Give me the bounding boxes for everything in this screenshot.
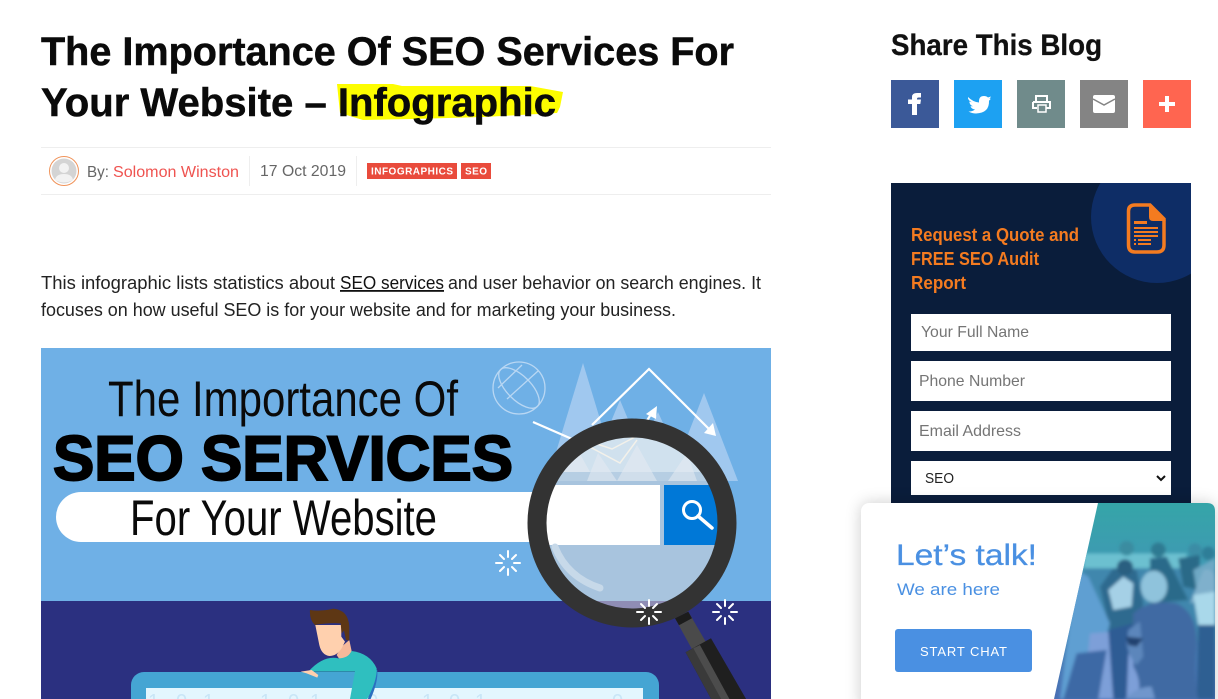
chat heading: Let’s talk!: [896, 539, 1037, 572]
print button: [1017, 80, 1065, 128]
start chat button: START CHAT: [920, 644, 1007, 659]
chat subheading: We are here: [897, 580, 1000, 599]
arrow heads: [646, 406, 716, 436]
title line 2: Your Website – Infographic: [41, 81, 556, 125]
field: service select: [911, 461, 1171, 495]
dark band: [41, 601, 771, 699]
form heading: Report: [911, 273, 966, 293]
author avatar: [50, 156, 78, 186]
sparkle center: [637, 600, 661, 624]
search pill: [56, 492, 560, 542]
field: name: Your Full Name: [921, 324, 1029, 341]
author: By:: [87, 164, 109, 181]
field: phone: [911, 361, 1171, 401]
intro paragraph: focuses on how useful SEO is for your website and for marketing your business.: [41, 300, 676, 320]
document badge: [1091, 183, 1191, 283]
sparkle right: [713, 600, 737, 624]
infographic image: [41, 348, 771, 699]
meta bar: [41, 147, 771, 195]
sky background: [41, 348, 771, 601]
graphic heading bottom: For Your Website: [130, 490, 437, 546]
share buttons: [891, 80, 1191, 128]
intro paragraph: This infographic lists statistics about: [41, 273, 335, 293]
field: service select: SEO: [925, 470, 954, 487]
start chat button: [895, 629, 1032, 672]
magnifier lens: [548, 438, 718, 608]
field: name: [911, 314, 1171, 351]
email button: [1080, 80, 1128, 128]
magnifier ring: [537, 428, 727, 618]
form heading: Request a Quote and: [911, 225, 1079, 245]
magnifier handle: [675, 612, 747, 699]
graphic heading top: The Importance Of: [108, 371, 458, 427]
monitor: [131, 672, 659, 699]
share heading: Share This Blog: [891, 29, 1102, 62]
quote form panel: [891, 183, 1191, 503]
intro paragraph: and user behavior on search engines. It: [448, 273, 761, 293]
tag: seo: SEO: [465, 166, 487, 178]
author: Solomon Winston: [113, 164, 239, 181]
intro paragraph: [41, 273, 761, 320]
form heading: [911, 225, 1079, 293]
person: [301, 609, 377, 699]
title highlight: [337, 84, 563, 120]
twitter button: [954, 80, 1002, 128]
sparkle left: [496, 551, 520, 575]
form heading: FREE SEO Audit: [911, 249, 1039, 269]
tag: seo: [461, 163, 491, 179]
tag: infographics: [367, 163, 457, 179]
date: 17 Oct 2019: [260, 163, 346, 180]
more button: [1143, 80, 1191, 128]
globe icon: [492, 361, 546, 415]
chat widget: [861, 503, 1218, 699]
facebook button: [891, 80, 939, 128]
title line 1: The Importance Of SEO Services For: [41, 30, 734, 74]
intro paragraph: SEO services: [340, 273, 444, 293]
mountains: [550, 363, 738, 481]
graphic heading main: SEO SERVICES: [53, 424, 513, 494]
chat photo: [1050, 503, 1218, 699]
tag: infographics: INFOGRAPHICS: [371, 166, 453, 178]
field: email: [911, 411, 1171, 451]
trend arrows: [533, 369, 711, 439]
title: [41, 30, 734, 125]
field: email: Email Address: [919, 423, 1021, 440]
field: phone: Phone Number: [919, 373, 1026, 390]
